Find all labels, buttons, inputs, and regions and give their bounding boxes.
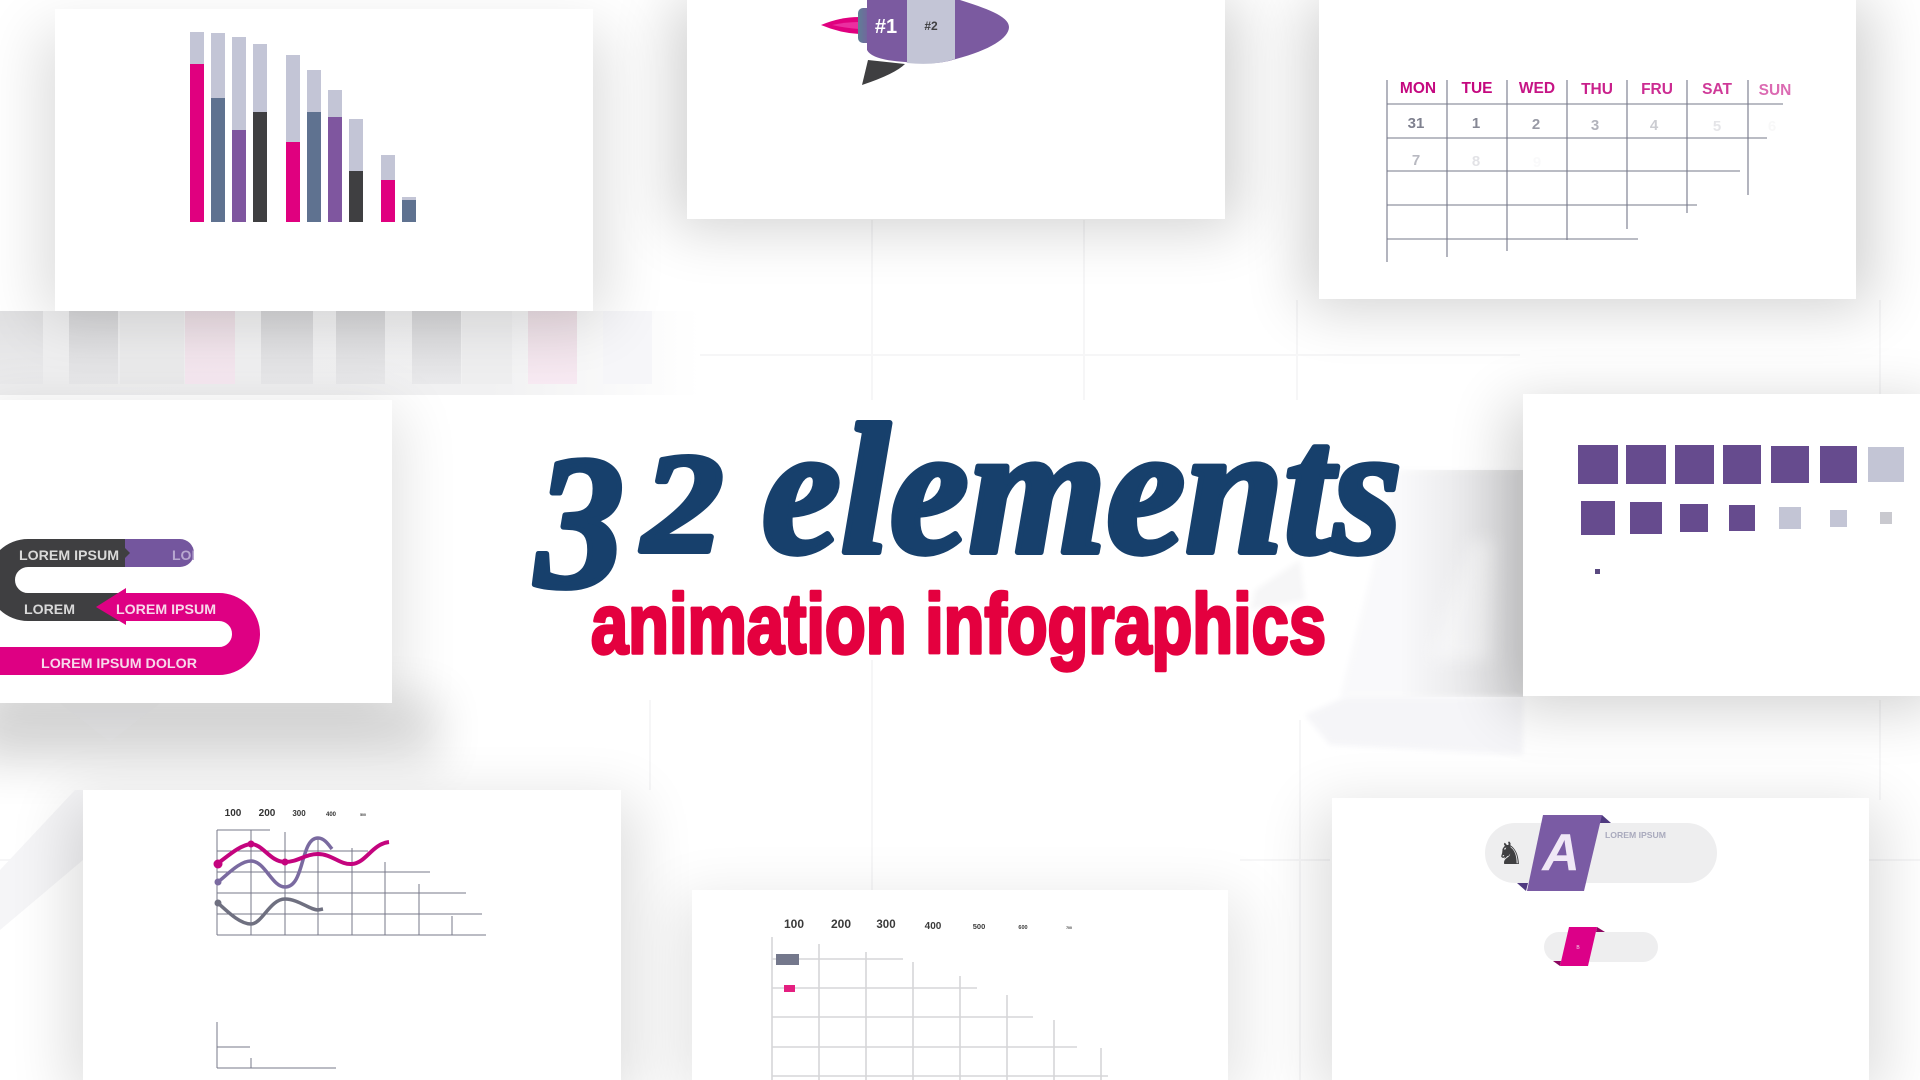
panel: square scale xyxy=(1523,394,1920,696)
axis labels: 500 xyxy=(973,922,985,931)
badge: B: B xyxy=(1576,945,1580,951)
title: 3 xyxy=(534,418,624,628)
weekday headers xyxy=(1400,80,1791,99)
ghost A ribbon behind title xyxy=(1250,470,1523,755)
line: purple series xyxy=(214,838,332,887)
ribbon labels: LOREM IPSUM DOLOR xyxy=(41,655,197,671)
badge: A: ♞ xyxy=(1496,836,1524,872)
axis labels: 300 xyxy=(292,809,306,818)
squares: row two xyxy=(1581,501,1892,535)
ribbon labels: LOREM xyxy=(24,601,75,617)
calendar dates: 31 xyxy=(1408,115,1424,132)
badge: A: A xyxy=(1540,824,1580,882)
axis labels: 400 xyxy=(326,812,337,818)
axis labels: 100 xyxy=(784,917,804,931)
weekday headers: SUN xyxy=(1759,82,1791,99)
subtitle: animation infographics xyxy=(591,577,1326,671)
bar: gray xyxy=(776,954,799,965)
weekday headers: WED xyxy=(1519,80,1555,97)
panel: ribbon badges xyxy=(1332,798,1869,1080)
weekday headers: THU xyxy=(1581,81,1613,98)
badge: A xyxy=(1485,815,1717,891)
icon: rocket: #1 xyxy=(875,16,897,38)
calendar dates: 3 xyxy=(1591,117,1599,134)
calendar dates: 2 xyxy=(1532,116,1540,133)
bars: values xyxy=(190,64,416,222)
ribbon: pink band xyxy=(0,607,246,661)
calendar dates: 7 xyxy=(1412,152,1420,169)
axis labels: 100 xyxy=(225,808,242,819)
panel: calendar xyxy=(1319,0,1856,299)
title: elements xyxy=(762,387,1402,593)
arrow: pink xyxy=(96,588,126,625)
line: gray series xyxy=(214,899,323,924)
ribbon labels: LOREM IPSUM xyxy=(116,601,216,617)
axis labels: 400 xyxy=(925,921,942,932)
axis labels: 600 xyxy=(1018,925,1028,931)
axis labels: 200 xyxy=(259,808,276,819)
bars: track columns xyxy=(190,32,416,222)
calendar dates xyxy=(1408,115,1776,171)
squares: row three xyxy=(1595,569,1600,574)
line: pink series xyxy=(214,840,389,868)
ribbon labels: LOREM xyxy=(172,547,223,563)
bar: pink xyxy=(784,985,795,992)
weekday headers: MON xyxy=(1400,80,1436,97)
chart grid xyxy=(217,830,486,1068)
calendar dates: 1 xyxy=(1472,115,1480,132)
ribbon labels: LOREM IPSUM xyxy=(19,547,119,563)
panel: rocket xyxy=(687,0,1225,219)
panel: ribbon process xyxy=(0,400,392,703)
axis labels: 500 xyxy=(360,813,366,817)
axis labels: 300 xyxy=(876,919,896,931)
calendar grid xyxy=(1387,80,1783,262)
calendar dates: 5 xyxy=(1713,118,1721,135)
icon: rocket xyxy=(821,0,1009,85)
axis labels: 200 xyxy=(831,917,851,931)
calendar dates: 6 xyxy=(1768,118,1776,135)
ribbon: purple end xyxy=(122,539,194,567)
badge: A: LOREM IPSUM xyxy=(1605,830,1666,840)
axis labels: 700 xyxy=(1066,926,1072,930)
squares: row one xyxy=(1578,445,1904,484)
weekday headers: FRU xyxy=(1641,81,1673,98)
ribbon: dark band xyxy=(1,553,125,607)
badge: B xyxy=(1544,927,1658,966)
calendar dates: 9 xyxy=(1533,154,1541,171)
panel: horizontal bar chart xyxy=(692,890,1228,1080)
calendar dates: 4 xyxy=(1650,117,1659,134)
weekday headers: TUE xyxy=(1462,80,1492,97)
chart grid xyxy=(772,937,1108,1080)
axis labels xyxy=(784,917,1072,932)
ribbon labels xyxy=(19,547,223,671)
arrow: dark xyxy=(122,545,130,561)
weekday headers: SAT xyxy=(1702,81,1732,98)
icon: rocket: #2 xyxy=(924,19,938,33)
panel: stacked bar chart xyxy=(55,9,593,311)
title: 2 xyxy=(641,424,723,582)
calendar dates: 8 xyxy=(1472,153,1480,170)
panel: line chart xyxy=(83,790,621,1080)
title xyxy=(534,387,1402,628)
axis labels xyxy=(225,808,366,819)
